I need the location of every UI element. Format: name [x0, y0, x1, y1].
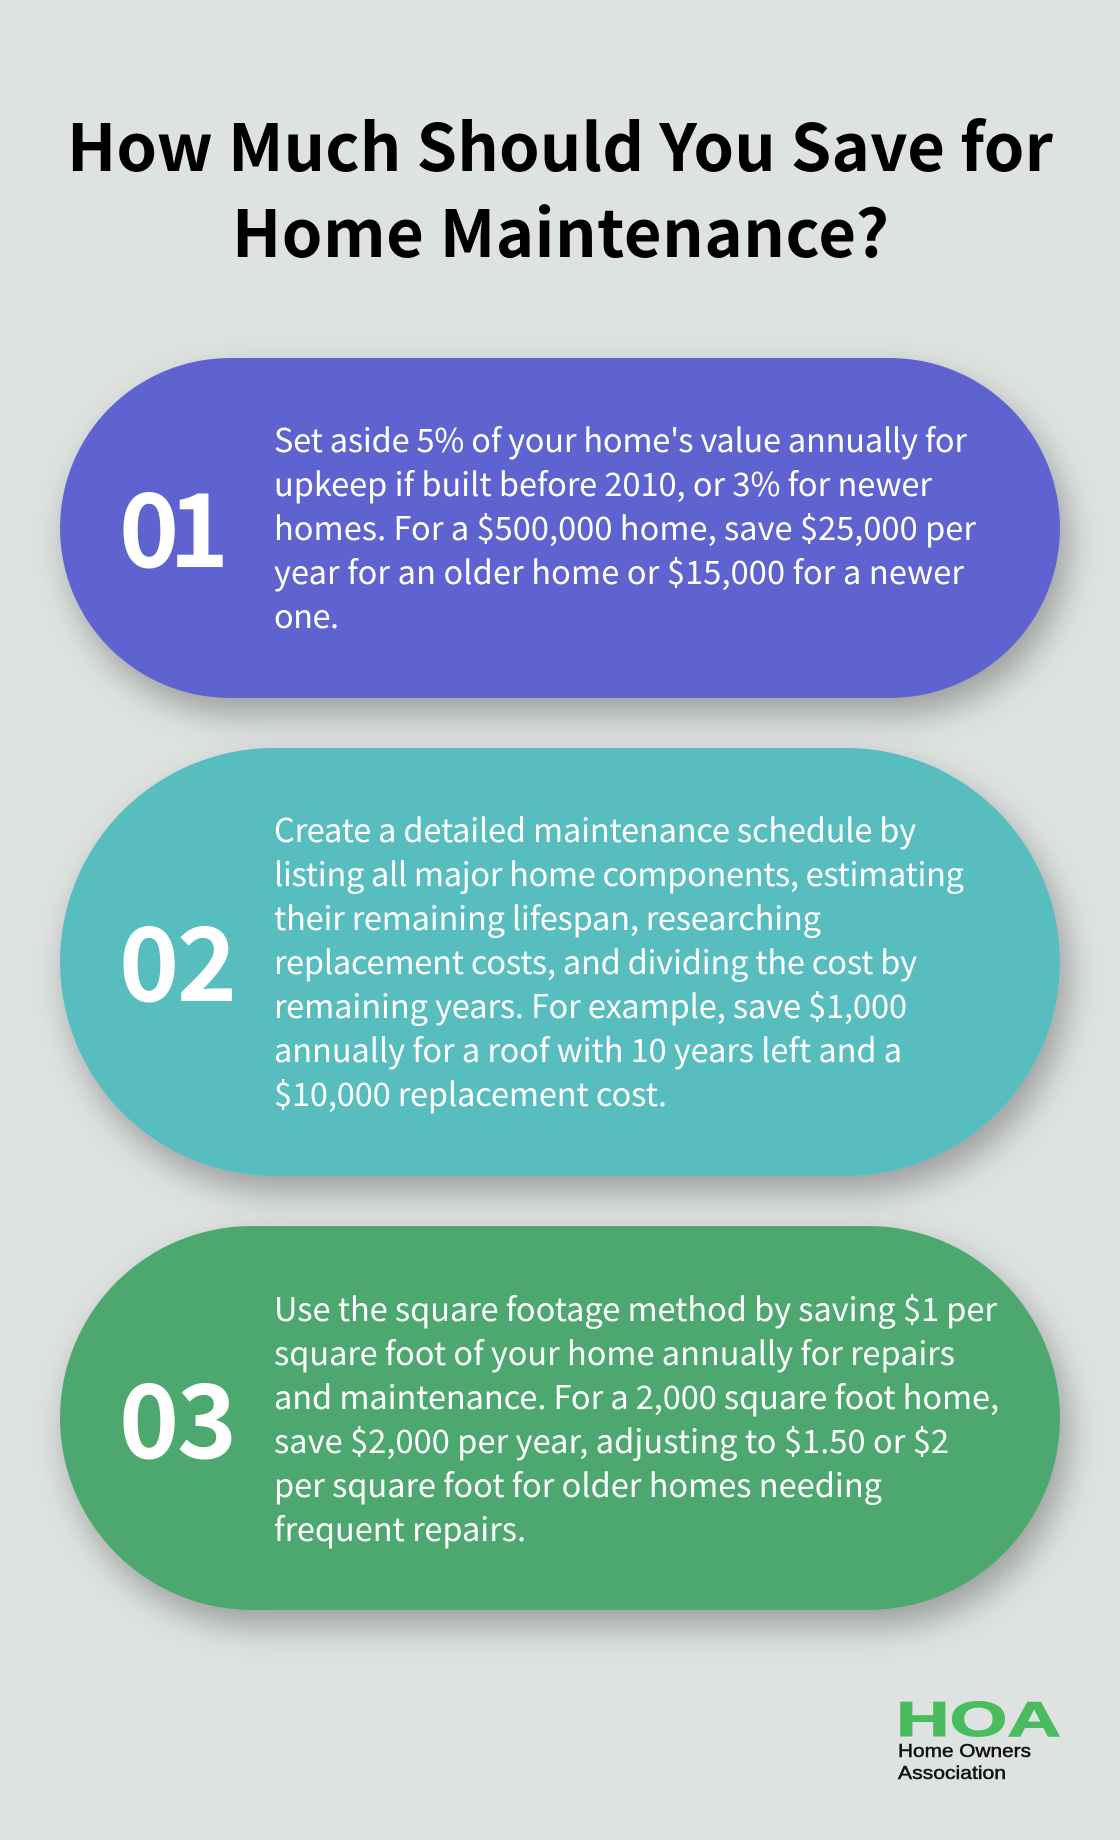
title: [67, 96, 1054, 276]
logo: HOA Home Owners Association: [896, 1693, 1061, 1783]
text block 02: $10,000 replacement cost.: [274, 1069, 667, 1116]
panel: step 01: [60, 358, 1060, 698]
logo tagline: Association: [898, 1762, 1006, 1783]
text block 03: and maintenance. For a 2,000 square foot home,: [274, 1372, 999, 1419]
text block 02: annually for a roof with 10 years left and a: [274, 1025, 902, 1072]
text block 03: per square foot for older homes needing: [274, 1460, 882, 1507]
text block 01: one.: [274, 591, 339, 638]
title: Home Maintenance?: [232, 182, 889, 276]
text block 03: Use the square footage method by saving $1 per: [274, 1284, 997, 1331]
logo tagline: Home Owners: [898, 1740, 1031, 1761]
panel: step 02: [60, 748, 1060, 1176]
title: How Much Should You Save for: [67, 96, 1054, 190]
number 01: 01: [119, 450, 229, 597]
pill background 02: [60, 748, 1060, 1176]
text block 01: upkeep if built before 2010, or 3% for newer: [274, 459, 932, 506]
panel: step 03: [60, 1226, 1060, 1610]
text block 02: Create a detailed maintenance schedule by: [274, 805, 916, 852]
logo tagline: [898, 1740, 1031, 1783]
text block 03: save $2,000 per year, adjusting to $1.50 or $2: [274, 1416, 949, 1463]
text block 03: square foot of your home annually for repairs: [274, 1328, 955, 1375]
number 03: 03: [119, 1341, 237, 1488]
text block 01: year for an older home or $15,000 for a newer: [274, 547, 964, 594]
text block 02: remaining years. For example, save $1,000: [274, 981, 907, 1028]
logo wordmark: HOA: [896, 1693, 1061, 1747]
text block 02: listing all major home components, estimating: [274, 849, 964, 896]
text block 02: their remaining lifespan, researching: [274, 893, 821, 940]
text block 03: frequent repairs.: [274, 1504, 526, 1551]
text block 01: homes. For a $500,000 home, save $25,000 per: [274, 503, 976, 550]
number 02: 02: [119, 884, 237, 1031]
text block 02: [274, 805, 964, 1116]
text block 01: Set aside 5% of your home's value annually for: [274, 415, 967, 462]
pill background 01: [60, 358, 1060, 698]
text block 01: [274, 415, 976, 638]
pill background 03: [60, 1226, 1060, 1610]
text block 02: replacement costs, and dividing the cost by: [274, 937, 917, 984]
text block 03: [274, 1284, 999, 1551]
